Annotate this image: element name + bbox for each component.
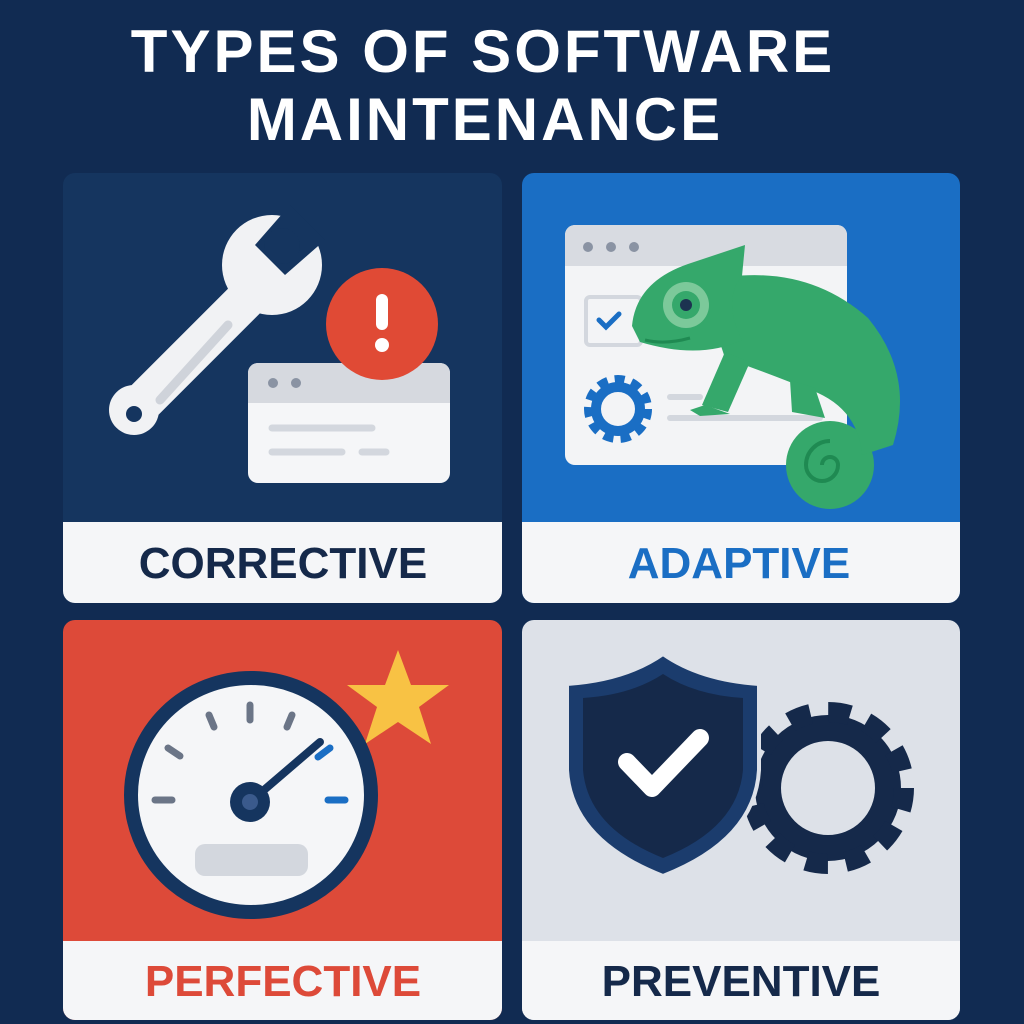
title: MAINTENANCE bbox=[247, 86, 723, 153]
icon: error window bbox=[248, 363, 450, 483]
icon: shield bbox=[567, 654, 759, 876]
label: corrective: CORRECTIVE bbox=[139, 539, 427, 588]
panel: adaptive bbox=[522, 173, 960, 603]
icon: speedometer bbox=[131, 678, 371, 912]
title: TYPES OF SOFTWARE bbox=[131, 18, 835, 85]
title bbox=[131, 18, 835, 153]
panel: perfective bbox=[63, 620, 502, 1020]
label: adaptive: ADAPTIVE bbox=[628, 539, 850, 588]
icon: wrench bbox=[109, 205, 325, 435]
icon: star bbox=[347, 650, 449, 744]
icon: gear blue bbox=[591, 382, 645, 436]
icon: browser window bbox=[565, 225, 847, 465]
label: perfective: PERFECTIVE bbox=[145, 957, 421, 1006]
icon: chameleon bbox=[632, 245, 900, 509]
panel: corrective bbox=[63, 173, 502, 603]
icon: gear navy bbox=[752, 712, 904, 864]
panel: preventive bbox=[522, 620, 960, 1020]
icon: alert bbox=[326, 268, 438, 380]
label: preventive: PREVENTIVE bbox=[602, 957, 880, 1006]
